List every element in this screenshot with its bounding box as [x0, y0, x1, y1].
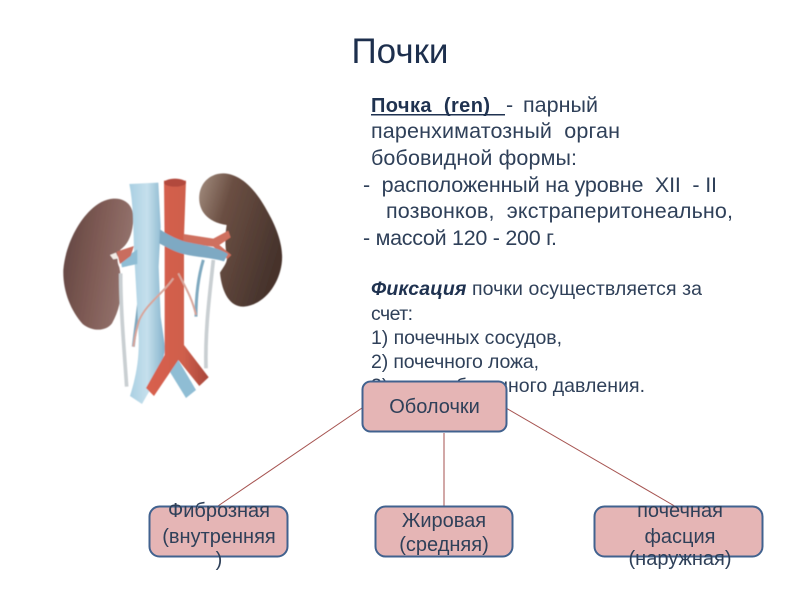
- gonadal artery: [133, 273, 196, 347]
- box: fascia: фасция: [644, 526, 716, 548]
- aorta: [146, 181, 209, 396]
- connector: to fatty: [443, 433, 445, 507]
- definition line 6: - массой 120 - 200 г.: [363, 226, 557, 250]
- illustration: kidneys and great vessels: [63, 173, 282, 404]
- right kidney: [199, 173, 282, 307]
- title: Почки: [352, 32, 448, 71]
- fixation line 1: Фиксация почки осуществляется за: [371, 278, 702, 300]
- box: fatty: (средняя): [399, 534, 489, 556]
- right ureter: [206, 260, 213, 368]
- definition heading term: Почка (ren): [371, 95, 490, 117]
- inferior vena cava: [129, 183, 165, 404]
- fixation line 3: 1) почечных сосудов,: [371, 327, 562, 349]
- vena cava lower branch: [167, 360, 196, 398]
- aorta top opening: [164, 179, 186, 187]
- definition line 4: - расположенный на уровне XII - II: [363, 173, 717, 197]
- box: fascia: почечная: [637, 500, 723, 522]
- definition line 2: паренхиматозный орган: [371, 119, 620, 143]
- fixation line 5: 3) внутрибрюшного давления.: [371, 375, 645, 397]
- gonadal vein: [133, 260, 203, 347]
- heading dash: -: [506, 93, 513, 117]
- box: fatty: Жировая: [402, 510, 486, 532]
- left renal vein stub: [121, 249, 137, 267]
- box: fascia: (наружная): [628, 548, 732, 570]
- left ureter: [121, 273, 127, 387]
- box: fibrous: ): [216, 549, 222, 571]
- box: fibrous: Фиброзная: [168, 500, 270, 522]
- connector: to fibrous: [215, 408, 362, 508]
- definition line 3: бобовидной формы:: [371, 146, 577, 170]
- heading word: парный: [523, 93, 598, 117]
- box: membranes: [362, 382, 506, 432]
- left kidney: [63, 199, 133, 330]
- text block: definition: [363, 93, 733, 250]
- definition line 5: позвонков, экстраперитонеально,: [386, 199, 733, 223]
- box: fatty: [376, 506, 512, 556]
- box: fascia: [594, 500, 762, 570]
- heading underline: [371, 114, 505, 116]
- fixation line 2: счет:: [371, 303, 413, 325]
- left renal artery: [117, 246, 134, 264]
- right renal artery: [183, 231, 231, 259]
- box: fibrous: [150, 500, 288, 571]
- box: fibrous: (внутренняя: [162, 526, 276, 548]
- fixation line 4: 2) почечного ложа,: [371, 351, 539, 373]
- box: membranes: Оболочки: [389, 396, 480, 418]
- text block: fixation: [371, 278, 702, 397]
- connector: to fascia: [506, 408, 678, 508]
- renal vein: [159, 229, 228, 261]
- vessel highlight: [110, 253, 118, 259]
